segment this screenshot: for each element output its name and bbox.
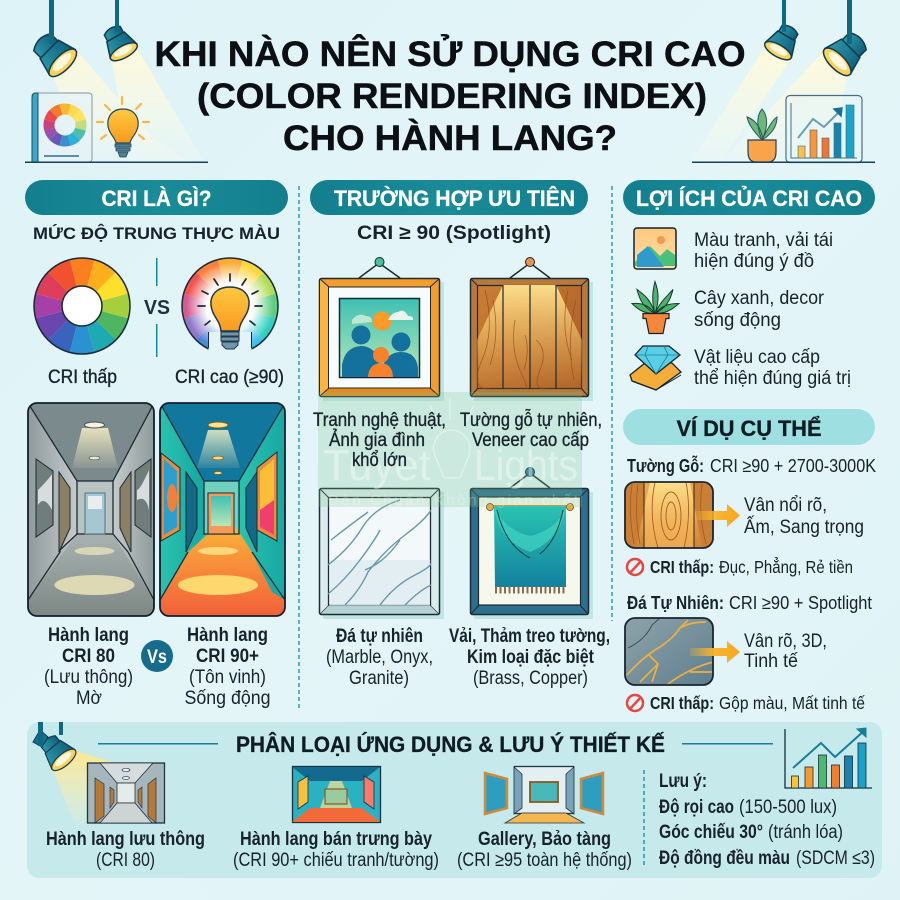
heading rules — [98, 743, 773, 744]
caption: corridor CRI 90+: (Tôn vinh) — [189, 667, 266, 688]
heading pill: CRI là gì — [25, 180, 288, 215]
watermark: Tuyet — [323, 441, 431, 490]
color wheel low CRI — [34, 258, 130, 354]
labels: CRI thấp and CRI cao: CRI cao (≥90) — [175, 367, 284, 388]
frame: art painting — [320, 258, 444, 401]
text: benefit 3: Vật liệu cao cấp — [694, 347, 820, 368]
text: stone result: Tinh tế — [744, 651, 798, 672]
subheading: CRI ≥ 90 (Spotlight) — [357, 223, 551, 244]
text: wood result — [744, 495, 864, 538]
icon: potted plant — [747, 109, 777, 162]
icon: small light bulb — [97, 97, 149, 157]
caption: tapestry — [449, 626, 610, 689]
arrow: wood result — [695, 504, 740, 527]
text: benefit 2: sống động — [694, 310, 781, 331]
heading pill: ví dụ cụ thể: VÍ DỤ CỤ THỂ — [676, 416, 822, 441]
chart icon — [785, 728, 872, 788]
caption: semi-gallery corridor — [233, 829, 439, 871]
caption: wood wall: Tường gỗ tự nhiên, — [460, 409, 602, 431]
heading: phân loại: PHÂN LOẠI ỨNG DỤNG & LƯU Ý THIẾT KẾ — [236, 732, 665, 757]
text: benefit 1 — [694, 230, 833, 272]
notes: Độ đồng đều màu — [659, 848, 790, 869]
corridor: CRI 80 — [28, 403, 154, 616]
warning: low CRI wood — [627, 556, 853, 577]
title: KHI NÀO NÊN SỬ DỤNG CRI CAO — [154, 34, 746, 74]
example: wood wall heading: Tường Gỗ: — [627, 455, 704, 476]
labels: CRI thấp and CRI cao — [48, 367, 284, 388]
text: benefit 1: hiện đúng ý đồ — [694, 251, 814, 272]
panel: trường hợp ưu tiên — [310, 180, 610, 689]
text: benefit 2: Cây xanh, decor — [694, 288, 825, 309]
heading pill: CRI là gì: CRI LÀ GÌ? — [102, 186, 212, 211]
icon: gallery — [485, 766, 603, 823]
text: wood result: Vân nổi rõ, — [744, 495, 827, 516]
caption: gallery: (CRI ≥95 toàn hệ thống) — [457, 850, 632, 871]
icon: bar chart board — [786, 96, 862, 162]
icon: spotlight right 2 — [819, 0, 873, 80]
caption: corridor CRI 80: (Lưu thông) — [44, 667, 133, 688]
frame: tapestry — [470, 468, 593, 619]
caption: wood wall — [460, 409, 602, 451]
heading pill — [623, 180, 875, 215]
caption: art painting: khổ lớn — [352, 450, 407, 471]
icon: circulation corridor — [88, 763, 164, 823]
vs divider: VS — [144, 297, 170, 319]
example: wood wall heading — [627, 455, 876, 476]
caption: tapestry: Kim loại đặc biệt — [467, 647, 595, 668]
text: wood result: Ấm, Sang trọng — [744, 516, 864, 538]
caption: tapestry: Vải, Thảm treo tường, — [449, 626, 610, 647]
notes: (150-500 lux) — [739, 797, 837, 818]
icon: spotlight right 1 — [762, 0, 804, 63]
panel: phân loại ứng dụng — [27, 722, 882, 878]
caption: art painting: Ảnh gia đình — [329, 429, 425, 451]
notes: Độ rọi cao — [659, 797, 734, 818]
corridor: CRI 90+ — [160, 403, 285, 616]
caption: natural stone: Granite) — [349, 668, 409, 689]
icon: diamond on material — [630, 346, 681, 390]
swatch: stone — [625, 618, 713, 685]
watermark: Lights — [474, 441, 578, 490]
example: stone heading — [627, 593, 872, 613]
color wheel high CRI with bulb — [182, 258, 278, 356]
notes: (tránh lóa) — [768, 822, 843, 843]
warning: low CRI stone: CRI thấp: — [650, 693, 714, 713]
example: stone heading: CRI ≥90 + Spotlight — [729, 593, 872, 613]
caption: wood wall: Veneer cao cấp — [472, 430, 589, 451]
caption: semi-gallery corridor: Hành lang bán trưng bày — [240, 829, 432, 850]
caption: corridor CRI 90+ — [184, 625, 270, 709]
subheading: MỨC ĐỘ TRUNG THỰC MÀU — [33, 224, 280, 243]
icon: picture — [634, 228, 676, 269]
caption: corridor CRI 90+: Hành lang — [187, 625, 268, 646]
icon: color swatch book — [32, 93, 92, 162]
panel: lợi ích — [623, 180, 876, 713]
arrow: stone result — [690, 641, 740, 663]
badge: Vs — [141, 640, 173, 672]
warning: low CRI wood: Đục, Phẳng, Rẻ tiền — [719, 556, 853, 577]
icon: plant — [632, 282, 679, 334]
frame: natural wood wall — [470, 258, 593, 401]
text: benefit 3 — [694, 347, 851, 389]
caption: circulation corridor: (CRI 80) — [96, 850, 155, 871]
example: wood wall heading: CRI ≥90 + 2700-3000K — [710, 456, 876, 476]
notes: (SDCM ≤3) — [796, 848, 875, 869]
panel: CRI là gì — [25, 180, 288, 709]
caption: art painting: Tranh nghệ thuật, — [313, 410, 446, 431]
caption: corridor CRI 80: CRI 80 — [62, 646, 115, 667]
labels: CRI thấp and CRI cao: CRI thấp — [48, 367, 117, 388]
caption: natural stone: (Marble, Onyx, — [326, 647, 433, 668]
text: benefit 3: thể hiện đúng giá trị — [694, 368, 851, 389]
text: stone result: Vân rõ, 3D, — [744, 631, 827, 652]
caption: circulation corridor — [46, 829, 205, 871]
caption: art painting — [313, 410, 446, 471]
example: stone heading: Đá Tự Nhiên: — [627, 593, 724, 613]
light beams: header — [52, 50, 847, 163]
caption: corridor CRI 90+: CRI 90+ — [196, 646, 259, 667]
title — [154, 34, 746, 158]
heading pill: TRƯỜNG HỢP ƯU TIÊN — [334, 186, 575, 211]
shelf right — [692, 162, 875, 163]
notes: Góc chiếu 30° — [659, 822, 763, 843]
text: stone result — [744, 631, 827, 672]
warning: low CRI stone — [627, 693, 865, 713]
caption: semi-gallery corridor: (CRI 90+ chiếu tranh/tường) — [233, 850, 439, 871]
caption: corridor CRI 80: Mờ — [76, 688, 102, 709]
caption: gallery — [457, 829, 632, 871]
swatch: wood — [625, 482, 713, 548]
caption: corridor CRI 80 — [44, 625, 133, 709]
title: CHO HÀNH LANG? — [283, 118, 617, 158]
caption: corridor CRI 80: Hành lang — [48, 625, 129, 646]
title: (COLOR RENDERING INDEX) — [197, 77, 707, 116]
icon: spotlight left 2 — [98, 0, 140, 64]
warning: low CRI stone: Gộp màu, Mất tinh tế — [719, 693, 865, 713]
watermark — [318, 392, 582, 509]
text: benefit 2 — [694, 288, 825, 331]
icon: semi-gallery corridor — [292, 766, 380, 822]
frame: natural stone — [320, 488, 444, 619]
column dividers — [299, 186, 612, 708]
corridor outlines — [28, 403, 285, 616]
caption: gallery: Gallery, Bảo tàng — [478, 829, 611, 850]
warning: low CRI wood: CRI thấp: — [650, 557, 714, 577]
vs divider — [144, 258, 170, 357]
heading pill — [310, 180, 588, 215]
text: benefit 1: Màu tranh, vải tái — [694, 230, 833, 251]
heading pill: LỢI ÍCH CỦA CRI CAO — [636, 186, 862, 211]
beam and spotlight — [33, 722, 115, 825]
divider — [643, 770, 645, 866]
notes: Lưu ý: — [659, 771, 707, 792]
shelf left — [25, 162, 208, 163]
watermark: Đèn Chuẩn Không gian chất — [328, 492, 579, 509]
caption: natural stone — [326, 626, 433, 689]
notes — [659, 771, 875, 869]
heading pill: ví dụ cụ thể — [623, 409, 875, 445]
caption: tapestry: (Brass, Copper) — [473, 668, 588, 689]
badge: Vs: Vs — [147, 647, 167, 668]
caption: corridor CRI 90+: Sống động — [184, 688, 270, 709]
icon: spotlight left 1 — [27, 0, 81, 81]
caption: natural stone: Đá tự nhiên — [336, 626, 423, 647]
caption: circulation corridor: Hành lang lưu thông — [46, 829, 205, 850]
